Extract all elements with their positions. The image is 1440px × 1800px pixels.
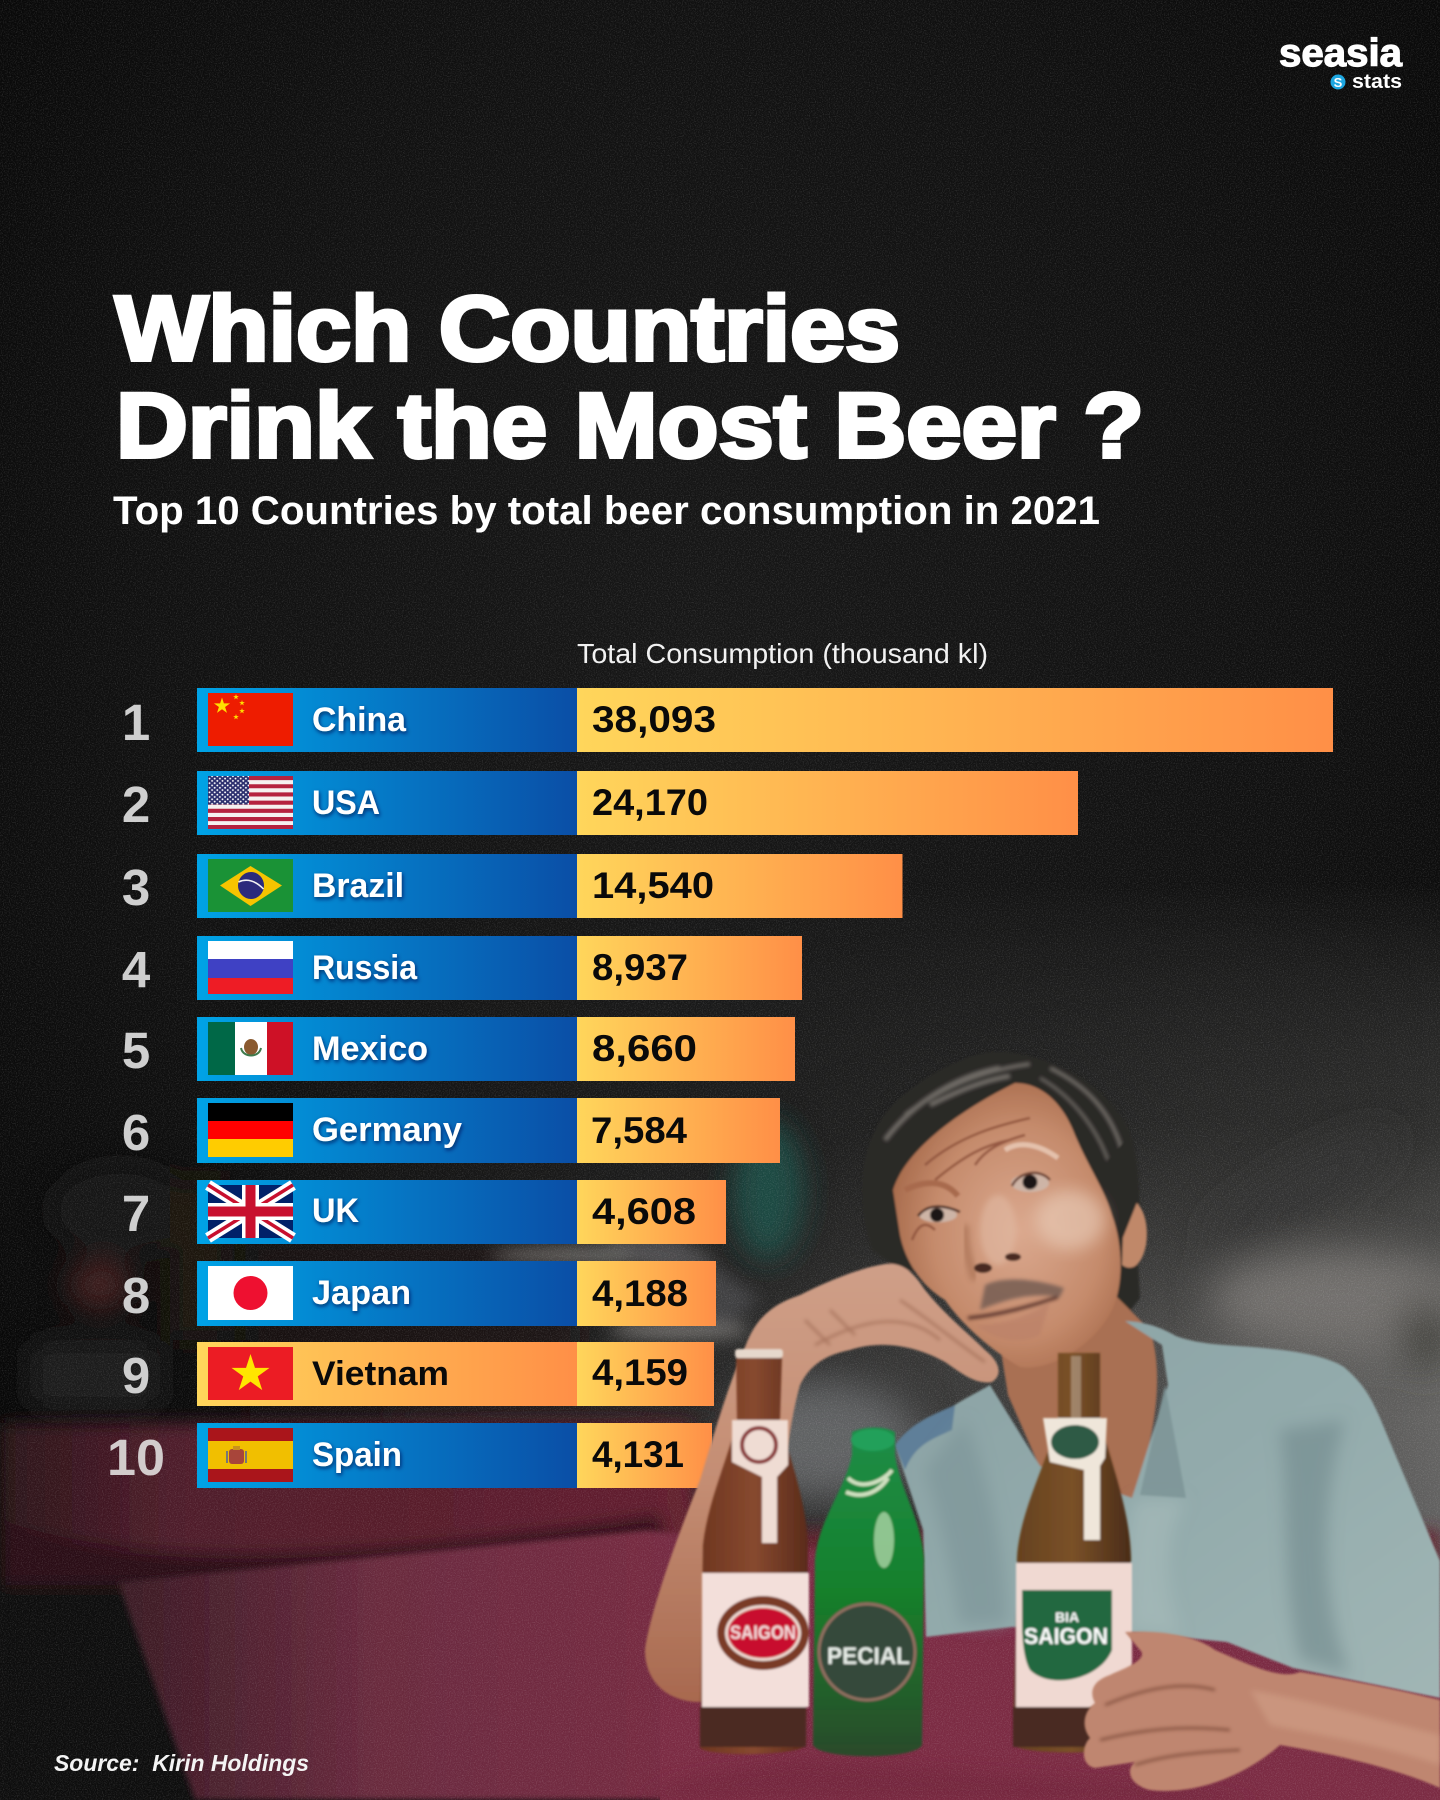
row 8: Japan: Japan — [312, 1274, 411, 1312]
face — [893, 1083, 1121, 1368]
flag: Spain — [208, 1428, 293, 1482]
row 6: Germany: 6 — [122, 1104, 150, 1161]
bar chart: top 10 countries — [107, 688, 1333, 1488]
row 2: USA — [122, 771, 1078, 835]
flag: Germany — [208, 1103, 293, 1157]
title: Which Countries — [115, 278, 900, 380]
bottle: Saigon red label: SAIGON — [730, 1623, 796, 1644]
row 2: USA: 2 — [122, 776, 150, 833]
row 9: Vietnam (highlighted): 9 — [122, 1347, 150, 1404]
arm and hand under chin — [645, 1264, 999, 1702]
row 3: Brazil: 3 — [122, 859, 150, 916]
flag: China — [208, 693, 293, 746]
logo: seasia stats — [1279, 32, 1402, 93]
row 2: USA: 24,170 — [592, 782, 708, 823]
finger creases — [805, 1300, 985, 1362]
row 6: Germany — [122, 1098, 780, 1163]
flag: UK — [208, 1185, 293, 1238]
subtitle: Top 10 Countries by total beer consumption in 2021 — [113, 489, 1100, 533]
row 3: Brazil: 14,540 — [592, 865, 714, 906]
row 9: Vietnam (highlighted) — [122, 1342, 714, 1406]
row 5: Mexico: 5 — [122, 1022, 150, 1079]
row 10: Spain — [107, 1423, 712, 1488]
flag: Vietnam — [208, 1347, 293, 1400]
row 1: China — [122, 688, 1333, 752]
row 5: Mexico: Mexico — [312, 1030, 428, 1068]
moustache and mouth — [968, 1279, 1064, 1340]
row 3: Brazil: Brazil — [312, 867, 404, 905]
forehead wrinkles — [912, 1118, 1030, 1240]
row 8: Japan — [122, 1261, 716, 1326]
row 8: Japan: 8 — [122, 1267, 150, 1324]
row 4: Russia — [122, 936, 802, 1000]
logo: seasia stats: seasia — [1279, 32, 1402, 75]
eyebrows and eyes — [905, 1145, 1058, 1222]
row 1: China: 38,093 — [592, 699, 716, 740]
row 7: UK: UK — [312, 1192, 359, 1230]
bottle: Saigon green label — [1013, 1353, 1132, 1752]
row 10: Spain: Spain — [312, 1436, 402, 1474]
row 7: UK: 7 — [122, 1185, 150, 1242]
source note: Source: Kirin Holdings — [54, 1750, 309, 1776]
row 6: Germany: Germany — [312, 1111, 462, 1149]
flag: Japan — [208, 1266, 293, 1320]
hair over temple — [1108, 1135, 1138, 1240]
bottle: Saigon red label — [700, 1349, 809, 1754]
axis label: Total Consumption (thousand kl) — [577, 638, 988, 669]
row 5: Mexico: 8,660 — [592, 1028, 697, 1069]
man: hair, head, arm and shirt — [645, 1052, 1440, 1702]
row 2: USA: USA — [312, 784, 380, 822]
shirt — [895, 1321, 1440, 1698]
row 1: China: 1 — [122, 694, 150, 751]
ear — [1122, 1199, 1147, 1268]
row 9: Vietnam (highlighted): Vietnam — [312, 1355, 449, 1393]
row 6: Germany: 7,584 — [591, 1110, 687, 1151]
hand holding bottle — [1084, 1632, 1440, 1791]
row 10: Spain: 10 — [107, 1429, 165, 1486]
photo: man leaning on his arm with beer bottles — [645, 1052, 1440, 1791]
nose and cheek highlights — [965, 1190, 1105, 1280]
flag: USA — [208, 776, 293, 829]
logo: seasia stats: stats — [1352, 71, 1402, 93]
bottle: green Special: PECIAL — [827, 1643, 910, 1670]
row 3: Brazil — [122, 854, 902, 918]
bottle: green Special — [813, 1428, 924, 1756]
row 1: China: China — [312, 701, 407, 739]
logo: seasia stats: S — [1334, 75, 1343, 90]
row 10: Spain: 4,131 — [592, 1434, 684, 1475]
row 5: Mexico — [122, 1017, 795, 1081]
row 4: Russia: 8,937 — [592, 947, 688, 988]
title — [115, 278, 1144, 477]
hair — [862, 1052, 1140, 1320]
flag: Brazil — [208, 859, 293, 912]
table: blurred maroon table — [0, 1423, 1440, 1800]
row 4: Russia: 4 — [122, 941, 151, 998]
bottle: Saigon green label: SAIGON — [1024, 1623, 1108, 1649]
title: Drink the Most Beer ? — [116, 375, 1144, 477]
row 7: UK — [122, 1180, 726, 1244]
neck — [1000, 1295, 1157, 1500]
row 9: Vietnam (highlighted): 4,159 — [592, 1352, 688, 1393]
row 7: UK: 4,608 — [592, 1191, 696, 1232]
flag: Mexico — [208, 1022, 293, 1075]
row 8: Japan: 4,188 — [592, 1273, 688, 1314]
bottle: Saigon green label: BIA — [1055, 1609, 1079, 1625]
row 4: Russia: Russia — [312, 949, 418, 987]
flag: Russia — [208, 941, 293, 994]
